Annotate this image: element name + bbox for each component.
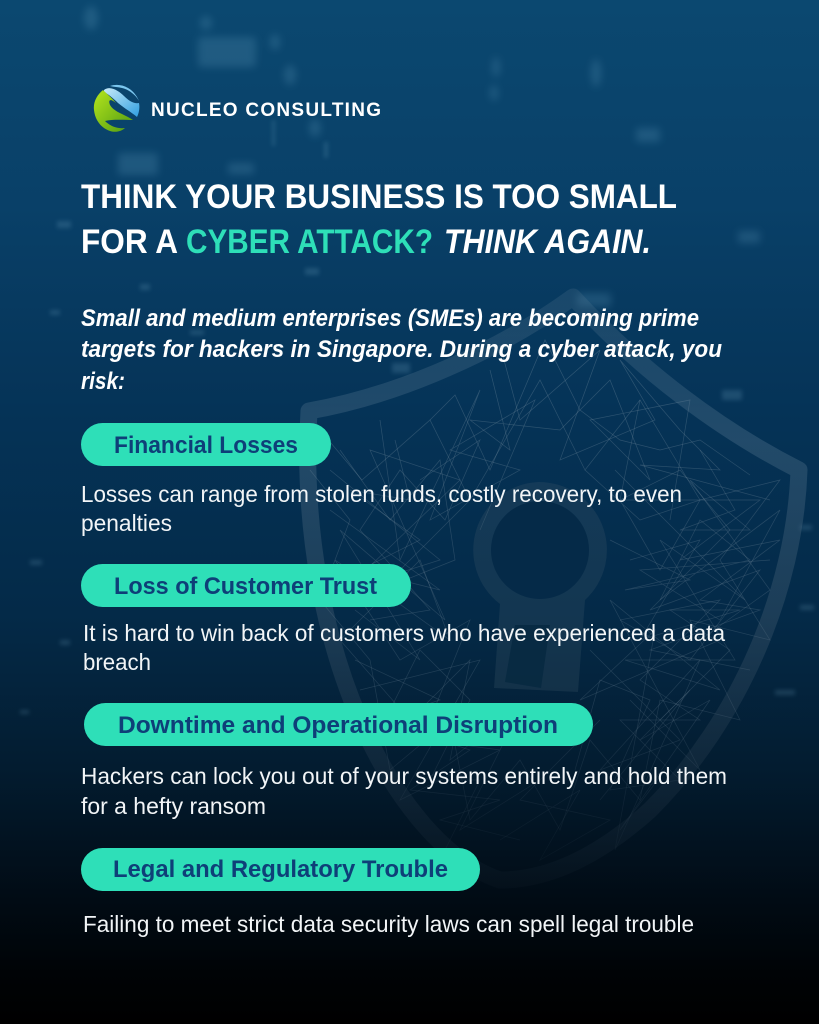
shield outline (308, 297, 799, 880)
description (81, 481, 682, 536)
pill heading: Loss of Customer Trust (114, 573, 377, 600)
intro paragraph (81, 305, 722, 395)
logo: Nucleo Consulting (94, 85, 381, 132)
item: loss of customer trust (81, 564, 725, 675)
pill heading (81, 848, 480, 891)
intro paragraph: Small and medium enterprises (SMEs) are becoming prime (81, 305, 699, 332)
intro paragraph: targets for hackers in Singapore. During a cyber attack, you (81, 336, 722, 363)
blurred data particles (84, 6, 760, 307)
pill heading (81, 423, 331, 466)
title: THINK YOUR BUSINESS IS TOO SMALL (81, 178, 677, 216)
small digital specks (20, 120, 814, 714)
description: Losses can range from stolen funds, costly recovery, to even (81, 481, 682, 507)
pill heading: Legal and Regulatory Trouble (113, 856, 448, 883)
intro paragraph: risk: (81, 368, 125, 395)
keyhole (473, 482, 607, 692)
pill heading (84, 703, 593, 746)
description: It is hard to win back of customers who have experienced a data (83, 620, 725, 646)
item: downtime and operational disruption (81, 703, 727, 819)
description: penalties (81, 510, 172, 536)
icon: globe swoosh (94, 85, 139, 132)
title: THINK AGAIN. (444, 223, 651, 261)
pill heading (81, 564, 411, 607)
description (81, 763, 727, 819)
wordmark: NUCLEO CONSULTING (151, 100, 381, 121)
description: for a hefty ransom (81, 793, 266, 819)
pill heading: Downtime and Operational Disruption (118, 712, 558, 739)
title: FOR A (81, 223, 178, 261)
description: breach (83, 649, 151, 675)
pill heading: Financial Losses (114, 432, 298, 459)
description: Hackers can lock you out of your systems entirely and hold them (81, 763, 727, 789)
item: financial losses (81, 423, 682, 536)
item: legal and regulatory trouble (81, 848, 694, 937)
description (83, 620, 725, 675)
title: CYBER ATTACK? (186, 223, 433, 261)
shield network mesh (310, 340, 780, 860)
description: Failing to meet strict data security laws can spell legal trouble (83, 911, 694, 937)
title (81, 178, 677, 261)
illustration: shield with network mesh and keyhole (308, 297, 799, 880)
